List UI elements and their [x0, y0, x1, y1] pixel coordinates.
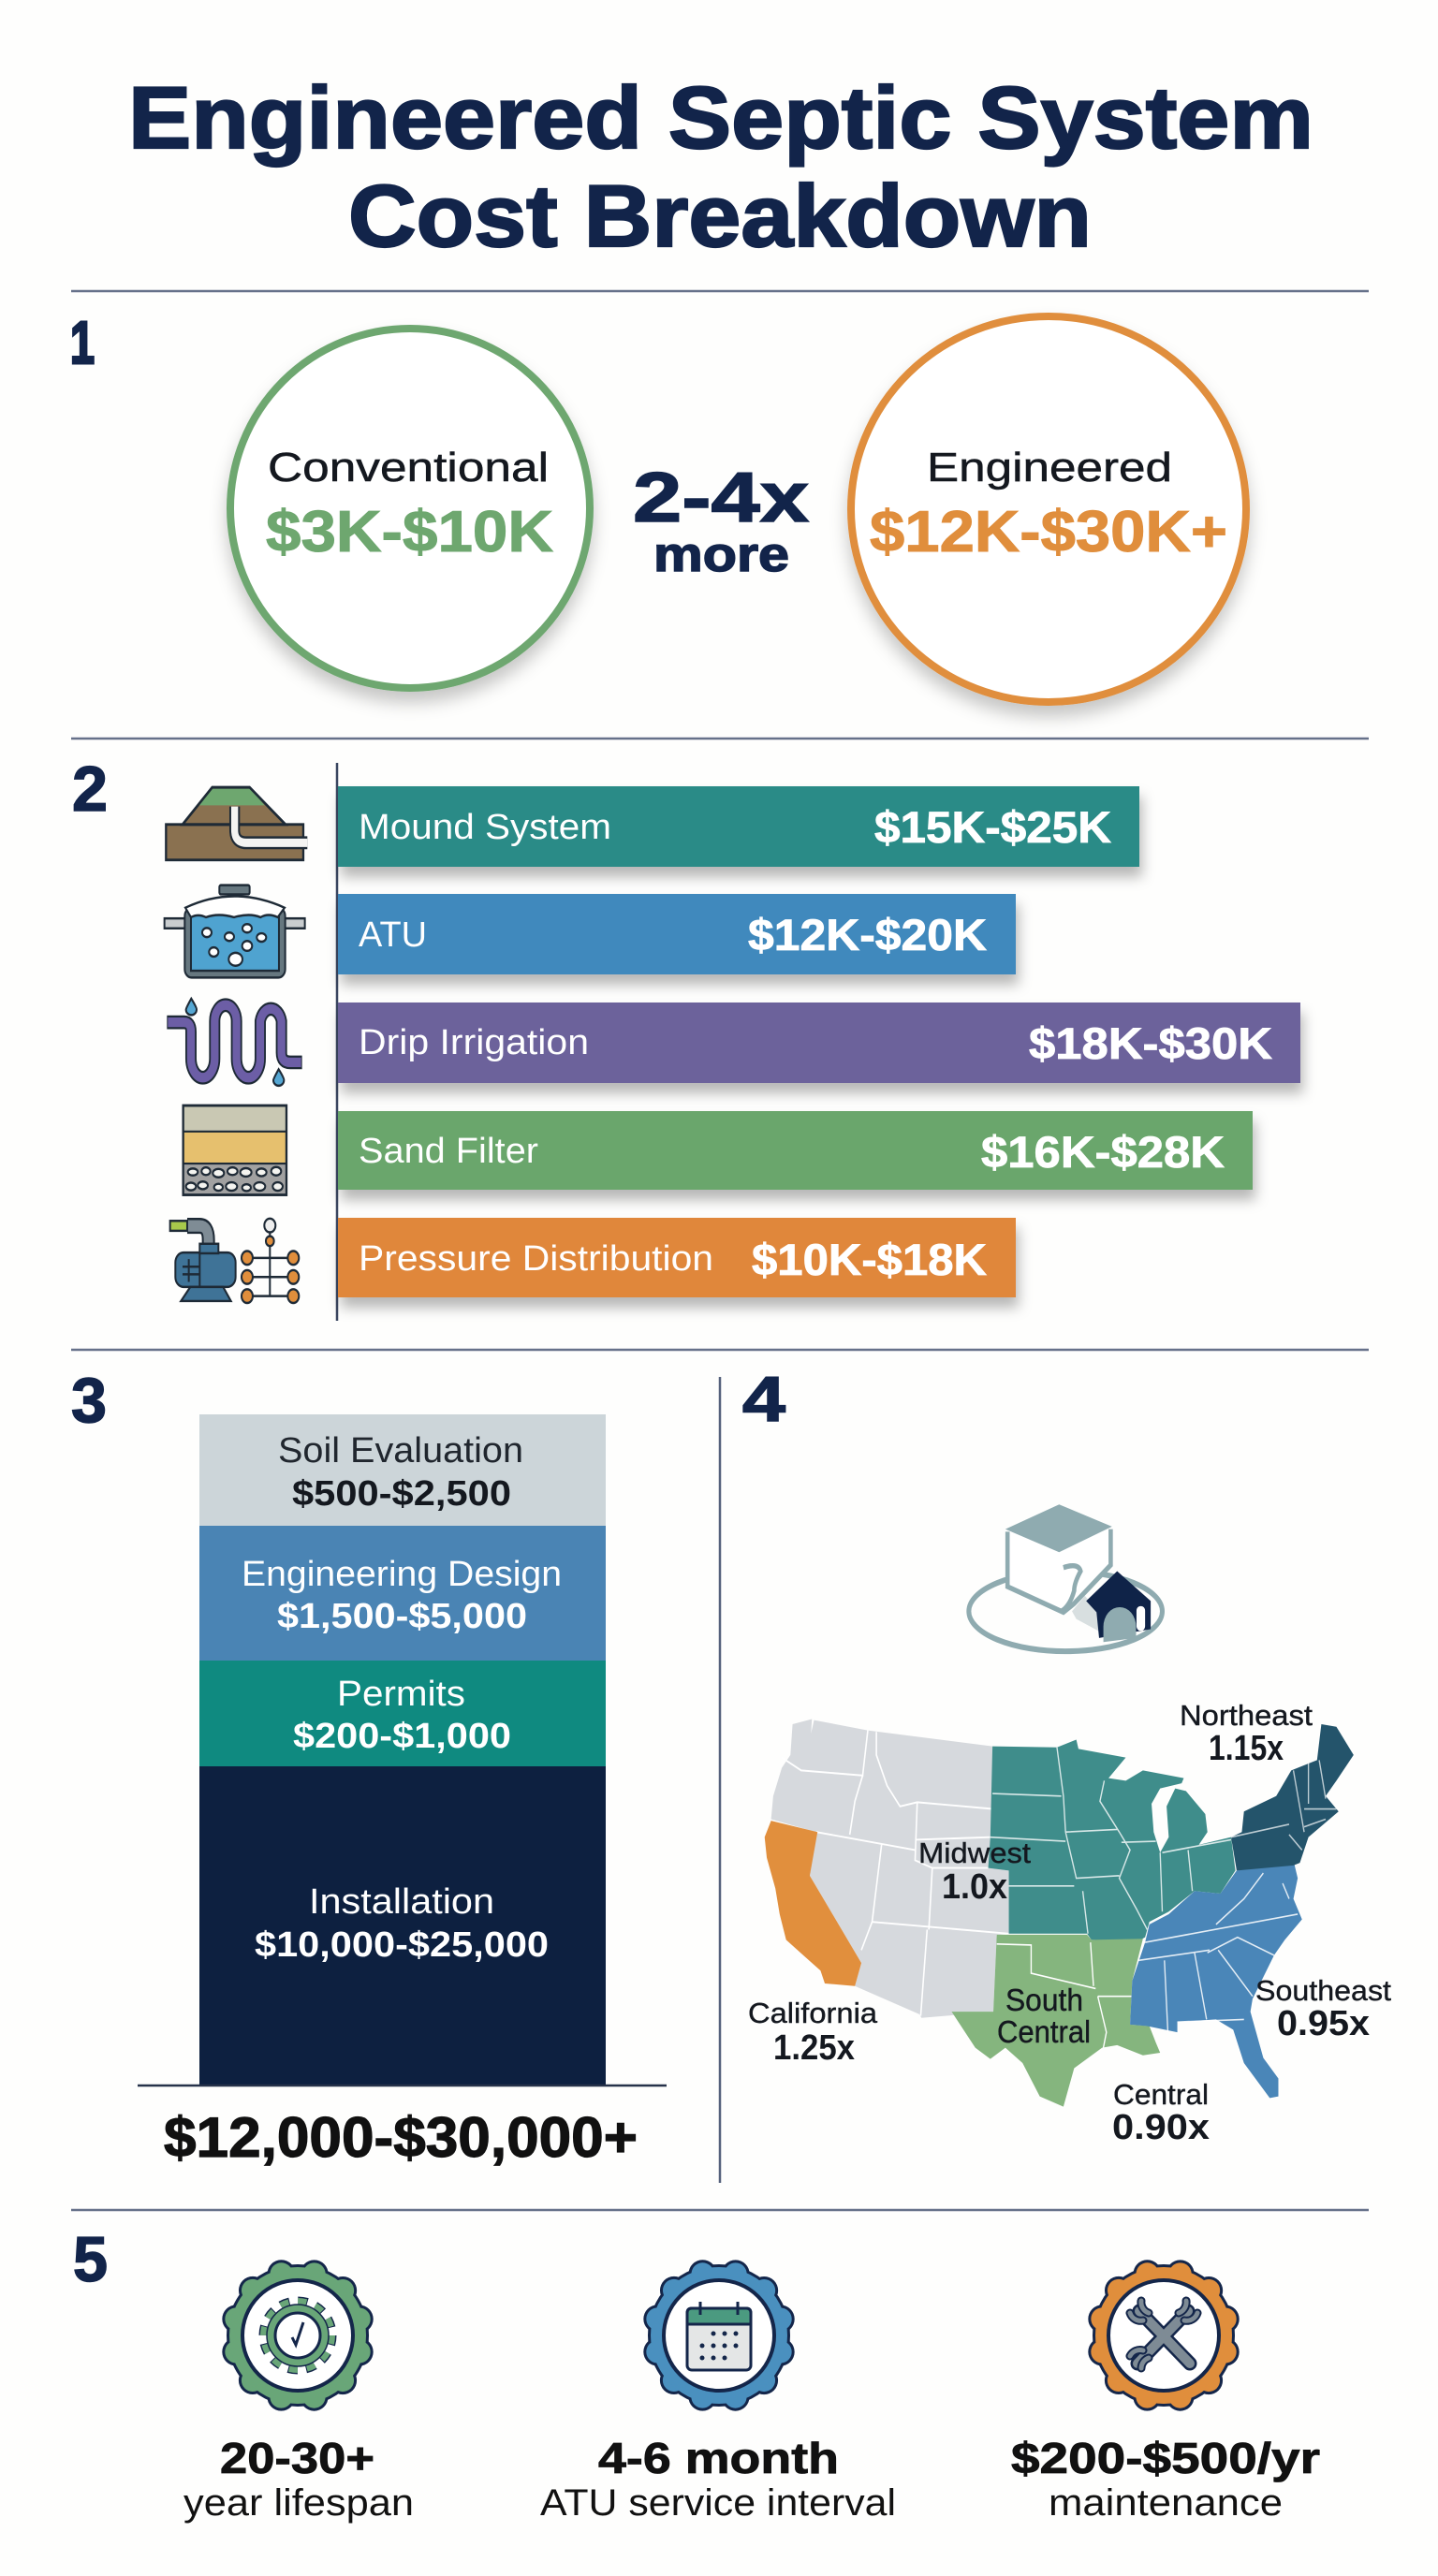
conventional circle: $3K-$10K [266, 500, 553, 564]
icon: ATU tank [165, 886, 305, 977]
engineered circle: Engineered [927, 445, 1172, 490]
region: southeast [1130, 1860, 1302, 2098]
engineered circle: $12K-$30K+ [870, 500, 1227, 564]
panel: system type costs [72, 754, 1300, 1321]
stack segment: permits [199, 1661, 606, 1766]
label: south central: South [1005, 1983, 1083, 2017]
bar: ATU [338, 894, 1016, 974]
stat: maintenance: maintenance [1049, 2482, 1283, 2524]
region: california [765, 1821, 861, 1986]
label: southeast: 0.95x [1277, 2004, 1370, 2043]
bar: mound system: Mound System [359, 808, 611, 847]
stack segment: installation: Installation [309, 1882, 494, 1922]
multiplier callout [633, 458, 809, 582]
section number 1: 1 [70, 309, 95, 376]
label: central [1112, 2078, 1210, 2147]
stat: service interval: ATU service interval [540, 2482, 896, 2524]
section number 2: 2 [72, 754, 108, 825]
stack segment: soil evaluation [199, 1414, 606, 1526]
label: central: Central [1113, 2078, 1209, 2111]
icon: sand filter [183, 1105, 286, 1195]
stack total: $12,000-$30,000+ [164, 2106, 638, 2169]
multiplier callout: 2-4x [633, 458, 809, 536]
stack segment: engineering design: $1,500-$5,000 [277, 1597, 527, 1636]
icon: pressure pump [170, 1219, 299, 1303]
engineered circle [851, 316, 1246, 702]
label: california [748, 1997, 878, 2068]
axis line [336, 763, 338, 1321]
panel: long-term facts [73, 2224, 1320, 2524]
stack segment: engineering design: Engineering Design [242, 1555, 562, 1594]
US map [765, 1720, 1354, 2107]
section number 4: 4 [742, 1364, 785, 1435]
label: southeast [1255, 1974, 1391, 2043]
region: northeast [1231, 1724, 1354, 1870]
label: northeast [1180, 1699, 1313, 1768]
icon: mound system [166, 787, 307, 860]
stat: service interval: 4-6 month [598, 2434, 839, 2482]
bar: sand filter: Sand Filter [359, 1132, 538, 1171]
stack segment: installation [199, 1766, 606, 2085]
bar: drip irrigation: $18K-$30K [1029, 1018, 1272, 1068]
bar: pressure distribution: $10K-$18K [752, 1235, 987, 1284]
label: california: California [748, 1997, 878, 2029]
region: west [771, 1720, 1009, 2018]
stat: service interval [540, 2434, 896, 2524]
label: midwest: Midwest [918, 1837, 1031, 1869]
bar: mound system [338, 786, 1139, 867]
bar: sand filter [338, 1111, 1253, 1190]
label: midwest [918, 1837, 1031, 1907]
label: southeast: Southeast [1255, 1974, 1391, 2007]
bar: pressure distribution [338, 1218, 1016, 1297]
stat: lifespan: year lifespan [183, 2482, 414, 2524]
bar: ATU: ATU [359, 915, 427, 955]
bar: drip irrigation [338, 1003, 1300, 1083]
bar: mound system: $15K-$25K [874, 802, 1111, 852]
bar: sand filter: $16K-$28K [981, 1127, 1225, 1177]
label: south central [997, 1983, 1091, 2049]
stat: lifespan [183, 2434, 414, 2524]
stack segment: permits: Permits [337, 1675, 465, 1714]
stat: maintenance: $200-$500/yr [1011, 2434, 1320, 2482]
label: northeast: Northeast [1180, 1699, 1313, 1732]
region: midwest [989, 1739, 1236, 1940]
section number 5: 5 [73, 2224, 108, 2295]
label: northeast: 1.15x [1209, 1729, 1284, 1768]
label: california: 1.25x [773, 2028, 855, 2068]
bar: drip irrigation: Drip Irrigation [359, 1023, 589, 1062]
panel: regional multipliers [742, 1364, 1391, 2147]
icon: gear clock badge [234, 2272, 361, 2399]
conventional circle: Conventional [268, 445, 549, 490]
multiplier callout: more [653, 528, 789, 582]
title [128, 68, 1313, 265]
stack segment: soil evaluation: $500-$2,500 [292, 1474, 511, 1514]
label: midwest: 1.0x [942, 1867, 1007, 1907]
stack segment: installation: $10,000-$25,000 [255, 1925, 549, 1965]
bar: ATU: $12K-$20K [748, 910, 987, 959]
title: Engineered Septic System [128, 68, 1313, 167]
bar: pressure distribution: Pressure Distribution [359, 1239, 713, 1279]
label: south central: Central [997, 2014, 1091, 2049]
conventional circle [230, 329, 590, 688]
section number 3: 3 [71, 1365, 107, 1436]
stack segment: permits: $200-$1,000 [293, 1717, 511, 1756]
panel: conventional vs engineered comparison [70, 309, 1246, 702]
panel: cost stack [71, 1365, 667, 2169]
icon: house and box [969, 1504, 1162, 1651]
title: Cost Breakdown [348, 167, 1092, 265]
stat: lifespan: 20-30+ [220, 2434, 374, 2482]
label: central: 0.90x [1112, 2108, 1210, 2147]
icon: drip irrigation [167, 999, 302, 1086]
stack segment: soil evaluation: Soil Evaluation [278, 1431, 523, 1471]
stack segment: engineering design [199, 1526, 606, 1661]
icon: calendar badge [655, 2272, 783, 2399]
icon: tools badge [1100, 2272, 1227, 2399]
region: south central [951, 1935, 1160, 2107]
stat: maintenance [1011, 2434, 1320, 2524]
